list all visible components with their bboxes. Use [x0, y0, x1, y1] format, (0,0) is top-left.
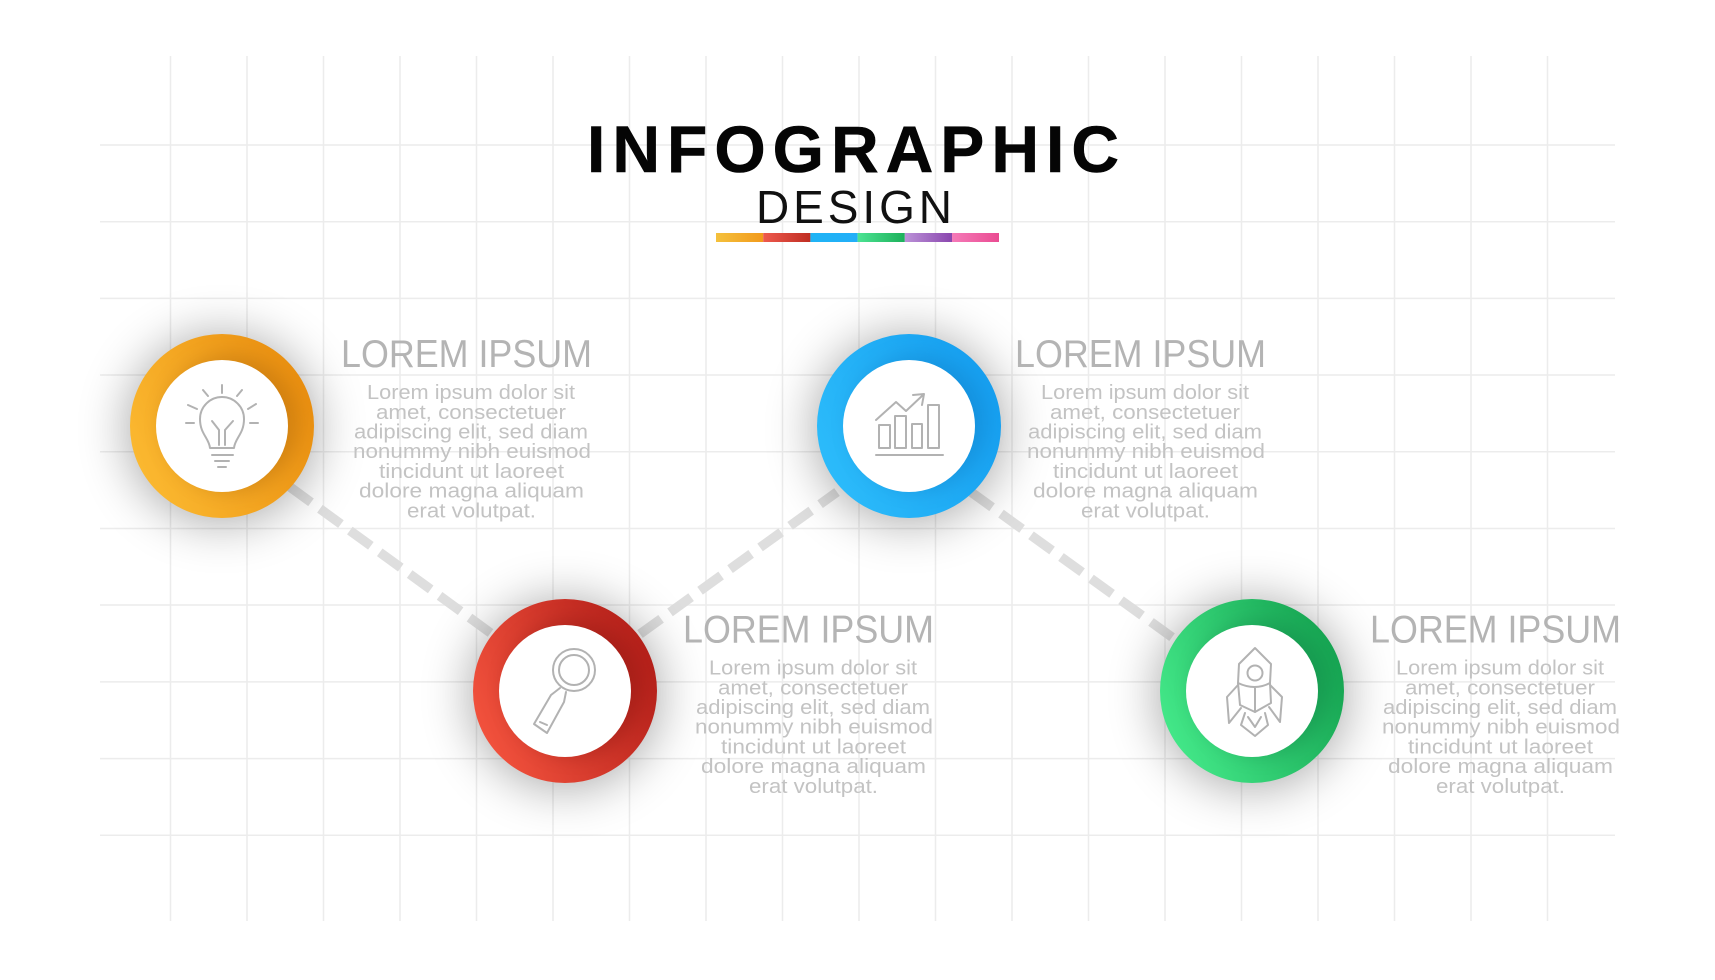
block body: adipiscing elit, sed diam: [1028, 422, 1262, 444]
block body: [353, 382, 591, 522]
dashed connectors: [290, 487, 1176, 640]
block body: erat volutpat.: [1436, 776, 1565, 798]
block body: nonummy nibh euismod: [353, 441, 591, 463]
step 4: green circle with rocket icon: [1158, 599, 1346, 788]
block body: adipiscing elit, sed diam: [354, 422, 588, 444]
block body: tincidunt ut laoreet: [721, 736, 907, 758]
step 1: orange circle with bulb icon: [128, 334, 316, 523]
text block 3: [1015, 333, 1266, 522]
text block 1: [341, 333, 592, 522]
block body: amet, consectetuer: [376, 402, 566, 424]
block body: [1027, 382, 1265, 522]
text block 4: [1370, 608, 1621, 798]
subheading: design: DESIGN: [756, 181, 952, 233]
block body: erat volutpat.: [1081, 500, 1210, 522]
block heading: LOREM IPSUM: [1370, 608, 1621, 652]
block body: dolore magna aliquam: [1033, 481, 1258, 503]
block body: [695, 658, 933, 798]
block body: Lorem ipsum dolor sit: [1396, 658, 1604, 680]
block body: tincidunt ut laoreet: [1408, 736, 1594, 758]
block body: Lorem ipsum dolor sit: [1041, 382, 1249, 404]
block body: amet, consectetuer: [718, 677, 908, 699]
block heading: LOREM IPSUM: [1015, 333, 1266, 376]
block body: nonummy nibh euismod: [1382, 717, 1620, 739]
block body: erat volutpat.: [407, 500, 536, 522]
block body: dolore magna aliquam: [359, 481, 584, 503]
step 2: red circle with magnifier icon: [471, 599, 659, 788]
block body: nonummy nibh euismod: [1027, 441, 1265, 463]
block heading: LOREM IPSUM: [341, 333, 592, 376]
heading: infographic: INFOGRAPHIC: [587, 112, 1119, 186]
text block 2: [683, 608, 934, 798]
block body: tincidunt ut laoreet: [379, 461, 565, 483]
icon: light bulb: [186, 385, 258, 467]
block body: Lorem ipsum dolor sit: [709, 658, 917, 680]
icon: rocket: [1227, 648, 1282, 736]
block body: amet, consectetuer: [1405, 677, 1595, 699]
rainbow underline: [716, 233, 999, 242]
icon: growth chart: [876, 394, 943, 455]
block body: adipiscing elit, sed diam: [696, 697, 930, 719]
title: [587, 112, 1119, 242]
block body: [1382, 658, 1620, 798]
block body: tincidunt ut laoreet: [1053, 461, 1239, 483]
block body: dolore magna aliquam: [701, 756, 926, 778]
block body: nonummy nibh euismod: [695, 717, 933, 739]
step 3: blue circle with chart icon: [815, 334, 1003, 523]
block body: dolore magna aliquam: [1388, 756, 1613, 778]
block body: Lorem ipsum dolor sit: [367, 382, 575, 404]
block body: adipiscing elit, sed diam: [1383, 697, 1617, 719]
block heading: LOREM IPSUM: [683, 608, 934, 652]
block body: amet, consectetuer: [1050, 402, 1240, 424]
block body: erat volutpat.: [749, 776, 878, 798]
icon: magnifier: [534, 649, 595, 733]
